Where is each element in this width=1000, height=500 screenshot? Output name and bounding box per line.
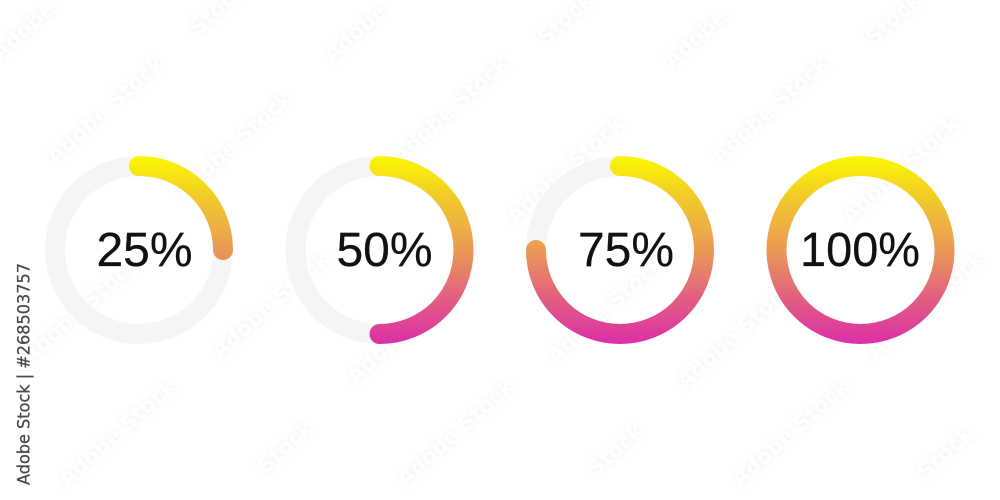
- watermark pattern: Adobe Stock: [170, 86, 297, 203]
- watermark pattern: Stock: [583, 418, 649, 481]
- progress ring: 75%: 75%: [578, 224, 674, 277]
- stock id caption: Adobe Stock | #268503757: [14, 263, 34, 485]
- progress ring: 75%: [536, 166, 704, 334]
- watermark pattern: Adobe Stock: [727, 374, 854, 491]
- watermark pattern: Adobe: [659, 5, 731, 73]
- watermark pattern: Adobe Stock: [542, 251, 669, 368]
- watermark pattern: Adobe Stock: [672, 276, 799, 393]
- progress ring: 100%: 100%: [800, 224, 920, 277]
- watermark pattern: Adobe Stock: [837, 111, 964, 228]
- watermark pattern: Adobe Stock: [387, 51, 514, 168]
- watermark pattern: Adobe Stock: [42, 51, 169, 168]
- watermark pattern: Adobe: [319, 0, 391, 67]
- watermark pattern: Adobe Stock: [54, 374, 181, 491]
- watermark pattern: Adobe Stock: [502, 111, 629, 228]
- watermark pattern: Stock: [253, 415, 319, 478]
- watermark pattern: Stock: [913, 421, 979, 484]
- watermark pattern: Adobe Stock: [17, 251, 144, 368]
- watermark pattern: Adobe Stock: [342, 271, 469, 388]
- watermark pattern: Adobe Stock: [392, 374, 519, 491]
- progress ring: 100%: [776, 166, 944, 334]
- progress ring: 25%: [55, 166, 223, 334]
- watermark pattern: Adobe Stock: [207, 246, 334, 363]
- watermark pattern: Adobe Stock: [707, 51, 834, 168]
- progress ring: 50%: 50%: [336, 224, 433, 277]
- watermark pattern: Adobe Stock: [862, 246, 989, 363]
- progress ring: 25%: 25%: [96, 224, 193, 277]
- progress ring: 50%: [296, 166, 464, 334]
